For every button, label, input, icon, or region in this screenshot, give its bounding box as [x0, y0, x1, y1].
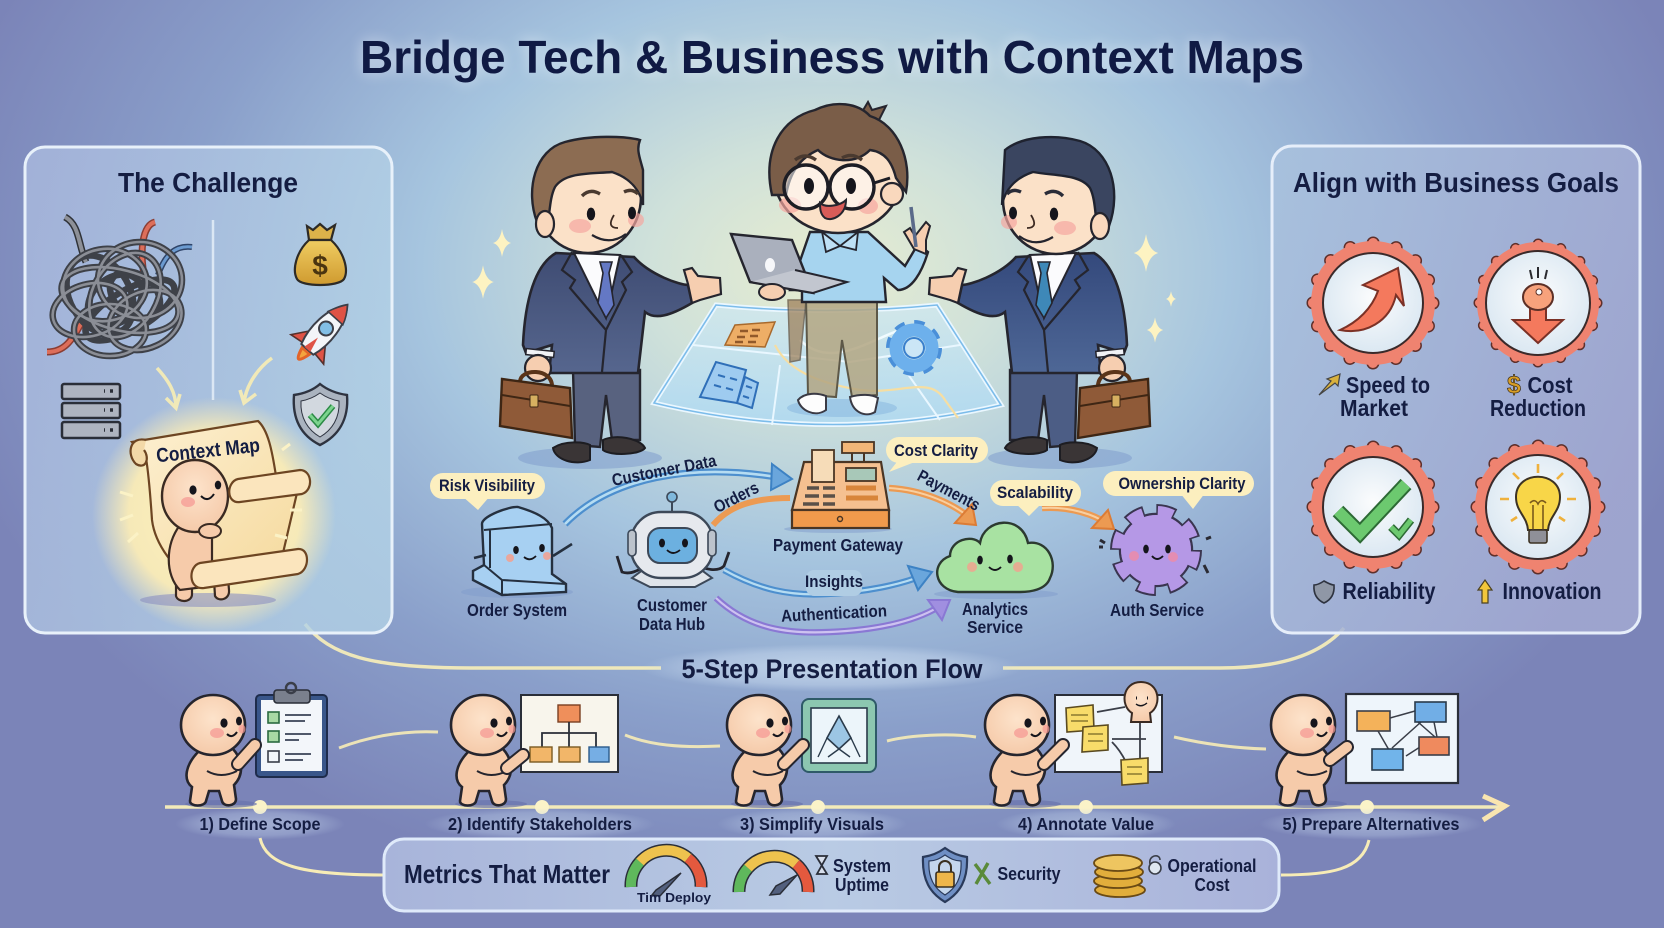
connector: timeline to metrics left	[260, 838, 384, 875]
timeline arrow	[165, 796, 1505, 820]
label: system uptime: System	[833, 855, 891, 876]
icon: tangled cables	[47, 217, 192, 361]
arrow label: authentication: Authentication	[781, 601, 887, 626]
character face	[181, 481, 221, 507]
panel background	[384, 839, 1279, 911]
arrow: tangle to context map	[157, 368, 180, 408]
character arm	[507, 755, 523, 768]
arrow: risks to context map	[240, 358, 272, 403]
label: reliability: Reliability	[1342, 578, 1436, 604]
icon: org chart board	[521, 695, 618, 772]
step 1: define scope	[175, 683, 345, 840]
badge: innovation	[1475, 444, 1601, 570]
heading: 5-step presentation flow	[642, 644, 1022, 692]
label: speed to market: Speed to	[1346, 372, 1430, 398]
service: payment gateway register	[784, 442, 892, 533]
label: 3) Simplify Visuals	[740, 814, 884, 834]
icon: blue buildings	[700, 362, 758, 408]
label: cost reduction: $	[1507, 371, 1521, 399]
callout: risk visibility: Risk Visibility	[439, 477, 536, 495]
panel heading: Align with Business Goals	[1293, 167, 1619, 198]
label: reliability	[1314, 578, 1436, 604]
label: payment gateway: Payment Gateway	[773, 535, 903, 555]
arrow label backing	[806, 570, 862, 596]
label: system uptime: Uptime	[835, 874, 889, 895]
step 3: simplify visuals	[717, 695, 907, 840]
arrow: authentication	[716, 598, 950, 632]
character	[451, 695, 527, 808]
step connectors	[339, 732, 1266, 749]
briefcase	[1078, 372, 1150, 438]
ground shadow	[140, 593, 276, 607]
panel: the challenge	[25, 147, 392, 633]
callout: scalability: Scalability	[997, 484, 1074, 502]
icon: security shield	[923, 848, 967, 902]
icon: orange grid card	[725, 322, 775, 347]
gauge: time deploy	[631, 850, 712, 905]
step 4: annotate value	[985, 682, 1176, 840]
character body	[169, 525, 212, 590]
highlight: context map glow	[92, 397, 336, 633]
character arm	[1330, 747, 1347, 760]
service: order system	[461, 507, 573, 598]
icon: shield	[294, 384, 347, 445]
sparkles	[472, 229, 1176, 343]
label: speed to market: Market	[1340, 395, 1408, 421]
label: operational cost: Cost	[1194, 874, 1230, 895]
label: customer data hub: Customer	[637, 595, 707, 615]
service: customer data hub robot	[617, 492, 729, 587]
badge: speed to market	[1311, 241, 1435, 365]
label: 1) Define Scope	[200, 814, 321, 834]
gauge: time deploy: Tim Deploy	[637, 890, 712, 905]
label: cost reduction: Cost	[1528, 372, 1573, 398]
chart: service context map	[430, 437, 1254, 637]
label: speed to market	[1319, 372, 1430, 421]
panel: metrics that matter	[384, 839, 1279, 911]
connector: timeline to metrics right	[1281, 840, 1369, 875]
panel heading: The Challenge	[118, 167, 298, 198]
badge: cost reduction	[1477, 242, 1599, 364]
icon: server rack	[62, 384, 120, 438]
callout: cost clarity	[886, 437, 988, 472]
label: customer data hub: Data Hub	[639, 614, 705, 634]
arrow: customer data	[565, 464, 792, 524]
icon: blue gear	[892, 326, 936, 370]
panel: align with business goals	[1272, 146, 1640, 633]
label: operational cost	[1168, 855, 1256, 895]
icon: hourglass	[816, 856, 827, 874]
step 2: identify stakeholders	[425, 695, 655, 840]
label: analytics service: Service	[967, 617, 1023, 637]
label: analytics service: Analytics	[962, 599, 1028, 619]
character arm	[1044, 745, 1063, 764]
scroll top-left roll	[131, 439, 147, 466]
callout: scalability	[990, 480, 1081, 516]
character hand	[199, 524, 221, 538]
illustration: holographic context map	[654, 305, 1001, 425]
scroll sheet	[132, 421, 300, 585]
illustration: context map scroll with character	[120, 421, 310, 607]
character	[727, 695, 803, 808]
character: developer with laptop	[731, 102, 930, 417]
label: order system: Order System	[467, 600, 567, 620]
label: operational cost: Operational	[1168, 855, 1256, 876]
glow rays	[120, 444, 302, 542]
icon: money bag: $	[312, 250, 328, 281]
character legs	[176, 578, 229, 601]
character: right business person	[929, 137, 1150, 469]
character arm	[238, 745, 255, 764]
panel background	[25, 147, 392, 633]
icon: security cross	[975, 863, 990, 884]
service: analytics cloud	[934, 523, 1058, 599]
label: 5) Prepare Alternatives	[1282, 814, 1460, 834]
callout: risk visibility	[430, 473, 545, 510]
divider	[212, 220, 214, 400]
label: security: Security	[998, 863, 1061, 884]
briefcase	[500, 372, 572, 438]
arrow label: orders: Orders	[711, 478, 762, 517]
connector: challenge panel to flow heading	[305, 624, 661, 668]
icon: framed diagram	[802, 699, 876, 772]
head	[769, 102, 907, 233]
arrow label: insights: Insights	[805, 572, 863, 591]
character head	[162, 460, 228, 532]
icon: rocket	[282, 290, 364, 374]
label: cost reduction	[1490, 371, 1586, 421]
label: system uptime	[833, 855, 891, 895]
title: Bridge Tech & Business with Context Maps	[360, 31, 1304, 83]
callout: cost clarity: Cost Clarity	[894, 442, 979, 460]
icon: clipboard	[256, 683, 327, 777]
label: customer data hub	[637, 595, 707, 634]
label: analytics service	[962, 599, 1028, 637]
icon: alternatives board	[1346, 694, 1458, 783]
label: innovation: Innovation	[1502, 578, 1602, 604]
upper scroll roll	[229, 470, 310, 502]
arrow: orders	[713, 498, 790, 525]
icon: money bag	[295, 224, 346, 285]
label: auth service: Auth Service	[1110, 600, 1204, 620]
callout: ownership clarity: Ownership Clarity	[1118, 475, 1246, 493]
icon: coins	[1094, 855, 1145, 897]
character: left business person	[500, 137, 721, 469]
step 5: prepare alternatives	[1259, 694, 1483, 840]
panel heading: Metrics That Matter	[404, 859, 610, 889]
character	[181, 695, 257, 808]
gauge: system uptime	[739, 856, 808, 895]
arrow: payments	[889, 488, 976, 525]
scroll label: Context Map	[155, 435, 261, 467]
arrow: insights	[724, 566, 932, 594]
service: auth gear	[1099, 512, 1211, 588]
lower scroll roll	[191, 549, 307, 588]
callout: ownership clarity	[1103, 471, 1254, 509]
label: 2) Identify Stakeholders	[448, 814, 632, 834]
connector: goals panel to flow heading	[1003, 628, 1344, 668]
label: 4) Annotate Value	[1018, 814, 1154, 834]
character	[1271, 695, 1347, 808]
panel background	[1272, 146, 1640, 633]
heading: 5-step presentation flow: 5-Step Presentation Flow	[682, 654, 983, 684]
character arm	[784, 745, 803, 764]
icon: annotated board	[1055, 682, 1162, 785]
label: cost reduction: Reduction	[1490, 395, 1586, 421]
icon: small lock	[1149, 856, 1161, 874]
arrow label: payments: Payments	[914, 466, 983, 515]
arrow label: customer data: Customer Data	[610, 451, 718, 490]
arrow: scalability to auth	[1042, 508, 1114, 529]
badge: reliability	[1311, 445, 1435, 569]
character	[985, 695, 1061, 808]
laptop	[731, 234, 847, 300]
